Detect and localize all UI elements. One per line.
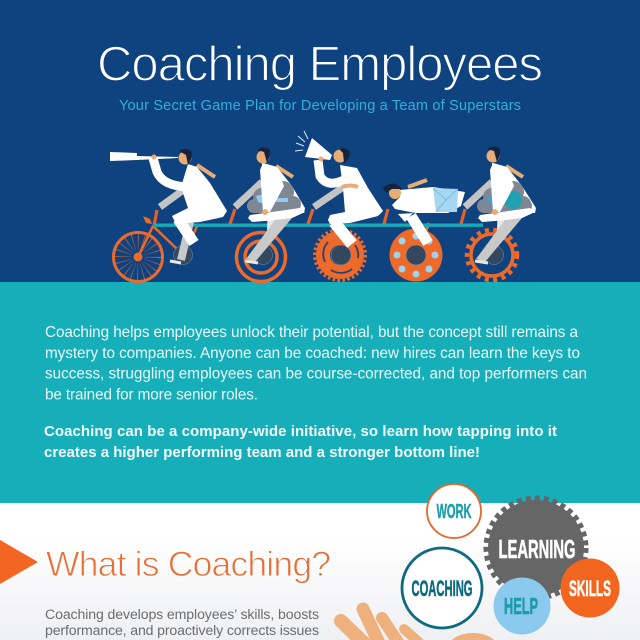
bubble: work: WORK: [436, 501, 472, 523]
icon: open hand: [341, 609, 498, 640]
text block: bold call to action: Coaching can be a company-wide initiative, so learn how tapping into it: [44, 423, 557, 440]
title: Coaching Employees: [97, 38, 543, 92]
text block: introduction: be trained for more senior roles.: [45, 386, 258, 404]
wheel 1: spoked wheel: [114, 232, 162, 282]
heading: what is coaching: What is Coaching?: [46, 544, 331, 584]
rider 2 with cloud: [235, 148, 305, 263]
rider 3 with megaphone: [295, 131, 383, 244]
text block: bold call to action: [44, 423, 557, 461]
wheel 2: double ring: [236, 232, 286, 282]
bubble: coaching: COACHING: [412, 576, 472, 601]
rider 4 bent forward with envelope: [383, 180, 465, 243]
bubble: work: [427, 484, 481, 538]
illustration: tandem bicycle team: [110, 131, 536, 282]
wheel 5: open gear: [467, 230, 517, 280]
bubble: learning gear: [486, 498, 586, 598]
icon: orange arrow: [0, 540, 38, 584]
text block: introduction: success, struggling employees can be course-corrected, and top performers can: [45, 366, 587, 382]
subtitle: Your Secret Game Plan for Developing a Team of Superstars: [119, 98, 521, 114]
text block: introduction: Coaching helps employees unlock their potential, but the concept still remains a: [45, 324, 578, 341]
rider 5 with cloud: [465, 146, 536, 263]
panel: what is coaching background: [0, 503, 640, 640]
teal frame bar: [153, 224, 483, 227]
text block: introduction: mystery to companies. Anyone can be coached: new hires can learn the keys to: [45, 345, 580, 362]
bubble: skills: [560, 558, 620, 618]
bubble: help: [494, 578, 550, 634]
text block: introduction: [45, 324, 587, 404]
text block: coaching description: performance, and proactively corrects issues: [45, 622, 319, 638]
text block: coaching description: Coaching develops employees’ skills, boosts: [45, 606, 319, 622]
wheel 3: toothed gear: [314, 230, 366, 280]
text block: coaching description: [45, 606, 319, 638]
wheel 4: disc with holes: [390, 228, 442, 282]
crank hubs: [174, 245, 504, 265]
bicycle frame: [138, 209, 465, 257]
panel: teal introduction background: [0, 282, 640, 503]
text block: bold call to action: creates a higher performing team and a stronger bottom line!: [44, 444, 480, 461]
bubble: learning gear: LEARNING: [498, 534, 576, 564]
bubble: coaching: [402, 548, 482, 628]
rider 1 with telescope: [110, 149, 227, 263]
bubble: help: HELP: [504, 593, 538, 619]
panel: header background: [0, 0, 640, 282]
